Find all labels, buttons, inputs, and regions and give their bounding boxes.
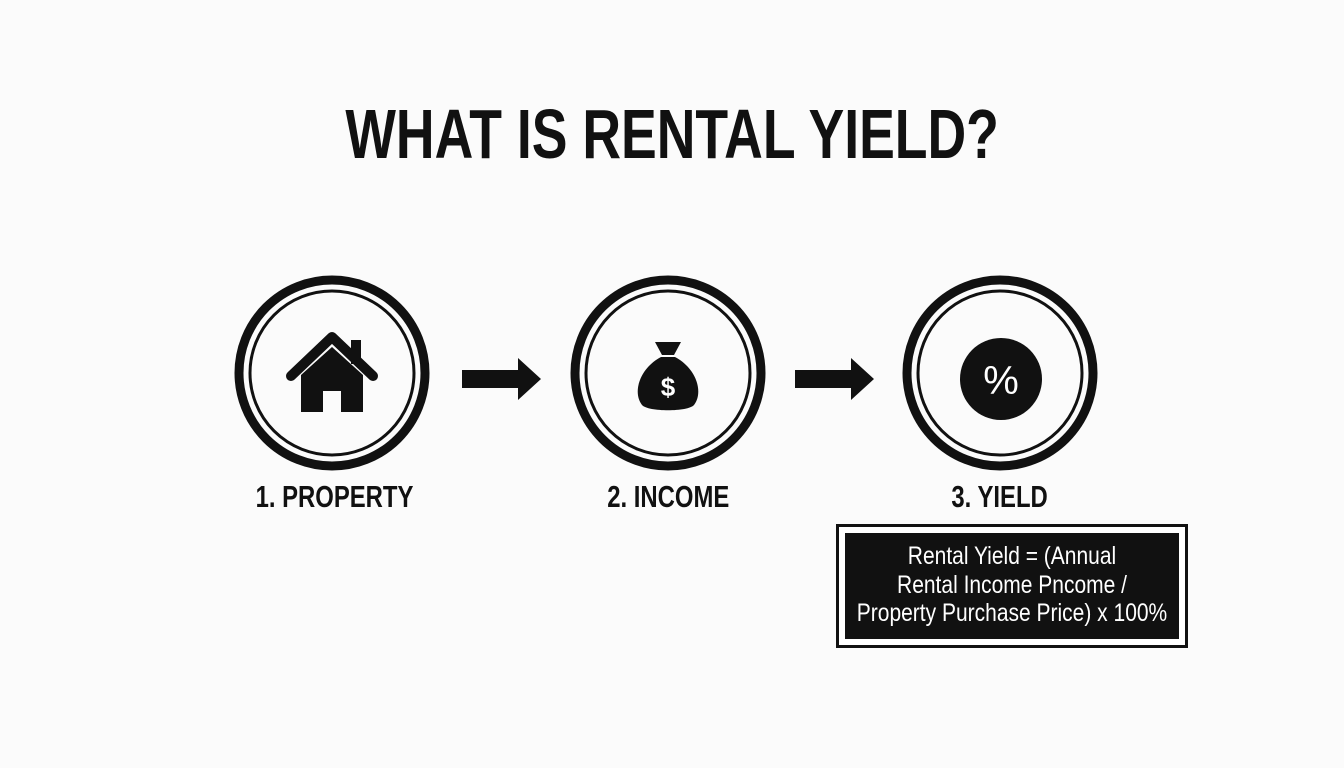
icon: money bag: $ bbox=[661, 372, 676, 402]
icon: money bag bbox=[638, 342, 698, 410]
formula box: Property Purchase Price) x 100% bbox=[857, 599, 1167, 627]
label 1: 1. PROPERTY bbox=[256, 479, 413, 514]
step 2 circle: income bbox=[575, 280, 761, 466]
arrow 1 bbox=[462, 358, 541, 400]
step 3 circle: yield bbox=[907, 280, 1093, 466]
icon: house bbox=[291, 337, 373, 412]
icon: percent bbox=[960, 338, 1042, 420]
icon: percent: % bbox=[983, 359, 1019, 403]
title: WHAT IS RENTAL YIELD? bbox=[345, 95, 999, 173]
formula box: Rental Income Pncome / bbox=[897, 570, 1127, 598]
arrow 2 bbox=[795, 358, 874, 400]
formula box: Rental Yield = (Annual bbox=[908, 542, 1116, 570]
formula box bbox=[836, 524, 1188, 648]
label 2: 2. INCOME bbox=[607, 479, 729, 514]
step 1 circle: property bbox=[239, 280, 425, 466]
label 3: 3. YIELD bbox=[952, 479, 1048, 514]
